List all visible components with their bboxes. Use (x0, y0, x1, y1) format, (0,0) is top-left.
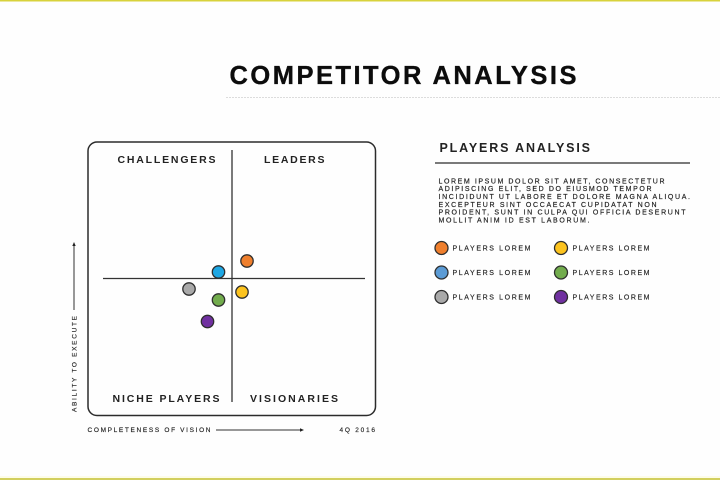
legend item: blue (435, 266, 531, 279)
body text: INCIDIDUNT UT LABORE ET DOLORE MAGNA ALIQUA. (438, 194, 690, 201)
quadrant label: leaders: LEADERS (264, 154, 324, 166)
legend item: blue: PLAYERS LOREM (452, 270, 531, 277)
arrow: y axis (72, 242, 76, 310)
legend item: orange (435, 242, 531, 254)
legend item: gray: PLAYERS LOREM (452, 294, 531, 302)
legend item: yellow (554, 242, 650, 254)
body text (438, 178, 690, 224)
body text: ADIPISCING ELIT, SED DO EIUSMOD TEMPOR (438, 186, 652, 193)
panel: players analysis (435, 141, 690, 304)
quadrant label: niche players: NICHE PLAYERS (112, 393, 220, 405)
data point: yellow (236, 286, 248, 298)
legend item: yellow: PLAYERS LOREM (572, 246, 650, 252)
body text: MOLLIT ANIM ID EST LABORUM. (438, 218, 590, 224)
heading: players analysis: PLAYERS ANALYSIS (440, 141, 590, 155)
body text: LOREM IPSUM DOLOR SIT AMET, CONSECTETUR (438, 178, 664, 186)
legend item: green: PLAYERS LOREM (572, 270, 650, 277)
legend item: purple (554, 290, 650, 304)
legend item: orange: PLAYERS LOREM (452, 246, 531, 252)
data point: gray (183, 283, 195, 295)
data point: purple (201, 315, 214, 328)
y axis label: ABILITY TO EXECUTE (72, 315, 78, 412)
body text: PROIDENT, SUNT IN CULPA QUI OFFICIA DESERUNT (438, 210, 686, 216)
date label: 4Q 2016 (340, 427, 375, 434)
body text: EXCEPTEUR SINT OCCAECAT CUPIDATAT NON (438, 202, 656, 209)
x axis label: COMPLETENESS OF VISION (88, 427, 211, 434)
data point: green (212, 294, 225, 306)
legend item: gray (435, 290, 531, 304)
quadrant label: visionaries: VISIONARIES (250, 393, 338, 405)
data point: orange (241, 255, 253, 267)
quadrant label: challengers: CHALLENGERS (118, 154, 216, 166)
legend item: purple: PLAYERS LOREM (572, 294, 650, 302)
arrow: x axis (216, 428, 304, 432)
title: COMPETITOR ANALYSIS (230, 62, 576, 90)
legend item: green (554, 266, 650, 279)
legend (435, 242, 650, 304)
data point: blue (212, 266, 225, 278)
panel: quadrant chart (88, 142, 376, 416)
